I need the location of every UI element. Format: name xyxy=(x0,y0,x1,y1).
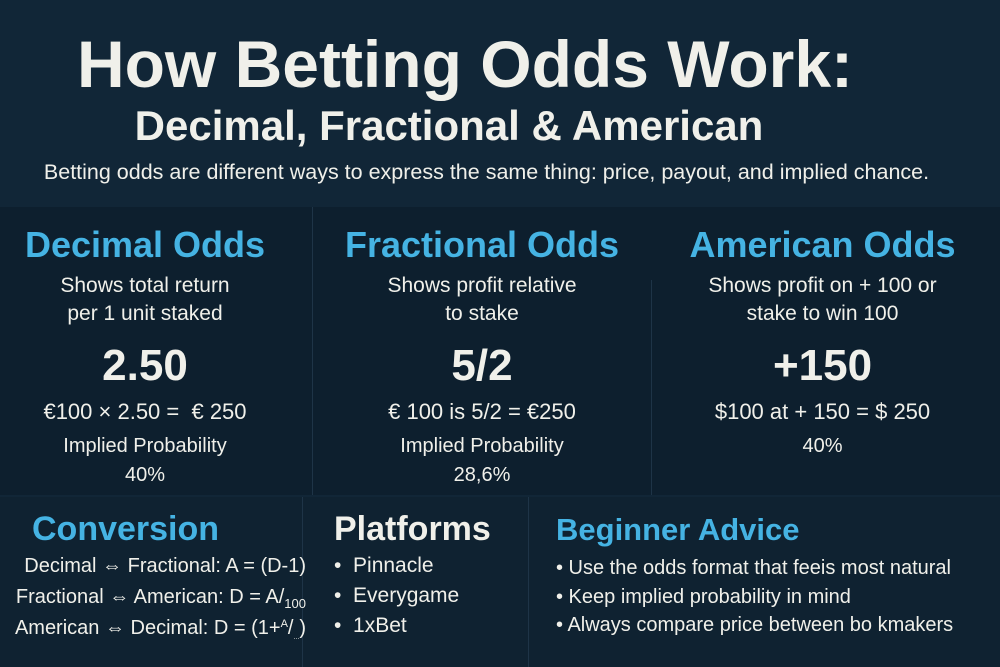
panel: platforms: • Pinnacle xyxy=(334,554,434,577)
panel: american odds: 40% xyxy=(802,435,843,457)
title: How Betting Odds Work: xyxy=(77,27,853,101)
panel: beginner advice: • Use the odds format that feeis most natural xyxy=(556,557,951,579)
panel: fractional odds: to stake xyxy=(445,302,519,325)
panel: beginner advice: • Keep implied probability in mind xyxy=(556,586,851,608)
intro text: Betting odds are different ways to express the same thing: price, payout, and implied chance. xyxy=(44,160,929,184)
panel: decimal odds: per 1 unit staked xyxy=(67,302,223,325)
panel: decimal odds xyxy=(25,224,265,486)
panel: conversion: Conversion xyxy=(32,510,219,548)
panel: platforms: • Everygame xyxy=(334,584,459,607)
panel: fractional odds: Implied Probability xyxy=(400,435,564,457)
panel: decimal odds: Implied Probability xyxy=(63,435,227,457)
panel: decimal odds: Decimal Odds xyxy=(25,224,265,265)
panel: american odds: $100 at + 150 = $ 250 xyxy=(715,399,930,424)
panel: bottom row background xyxy=(0,497,1000,667)
panel: fractional odds: Fractional Odds xyxy=(345,224,619,265)
panel: american odds xyxy=(689,224,956,457)
panel: american odds: Shows profit on + 100 or xyxy=(708,274,937,297)
panel: fractional odds: 28,6% xyxy=(454,464,510,486)
panel: beginner advice: Beginner Advice xyxy=(556,512,799,547)
panel: top row background xyxy=(0,207,1000,495)
panel: fractional odds: € 100 is 5/2 = €250 xyxy=(388,399,576,424)
panel: american odds: stake to win 100 xyxy=(747,302,898,325)
panel: fractional odds xyxy=(345,224,619,486)
panel: decimal odds: 2.50 xyxy=(102,341,188,390)
panel: decimal odds: €100 × 2.50 = € 250 xyxy=(43,399,247,424)
panel: beginner advice xyxy=(556,512,953,636)
panel: conversion xyxy=(15,510,306,641)
panel: conversion: Decimal ⇔ Fractional: A = (D-1) xyxy=(24,555,306,577)
panel: platforms xyxy=(334,510,491,637)
panel: fractional odds: 5/2 xyxy=(451,341,513,390)
panel: decimal odds: Shows total return xyxy=(60,274,230,297)
panel: beginner advice: • Always compare price between bo kmakers xyxy=(556,614,953,636)
panel: conversion: American ⇔ Decimal: D = (1+A/...) xyxy=(15,617,306,641)
panel: decimal odds: 40% xyxy=(125,464,165,486)
panel: platforms: • 1xBet xyxy=(334,614,407,637)
panel: american odds: +150 xyxy=(773,341,872,390)
panel: conversion: Fractional ⇔ American: D = A/100 xyxy=(16,586,306,611)
panel: american odds: American Odds xyxy=(689,224,956,265)
panel: platforms: Platforms xyxy=(334,510,491,548)
subtitle: Decimal, Fractional & American xyxy=(135,102,763,149)
panel: fractional odds: Shows profit relative xyxy=(387,274,577,297)
